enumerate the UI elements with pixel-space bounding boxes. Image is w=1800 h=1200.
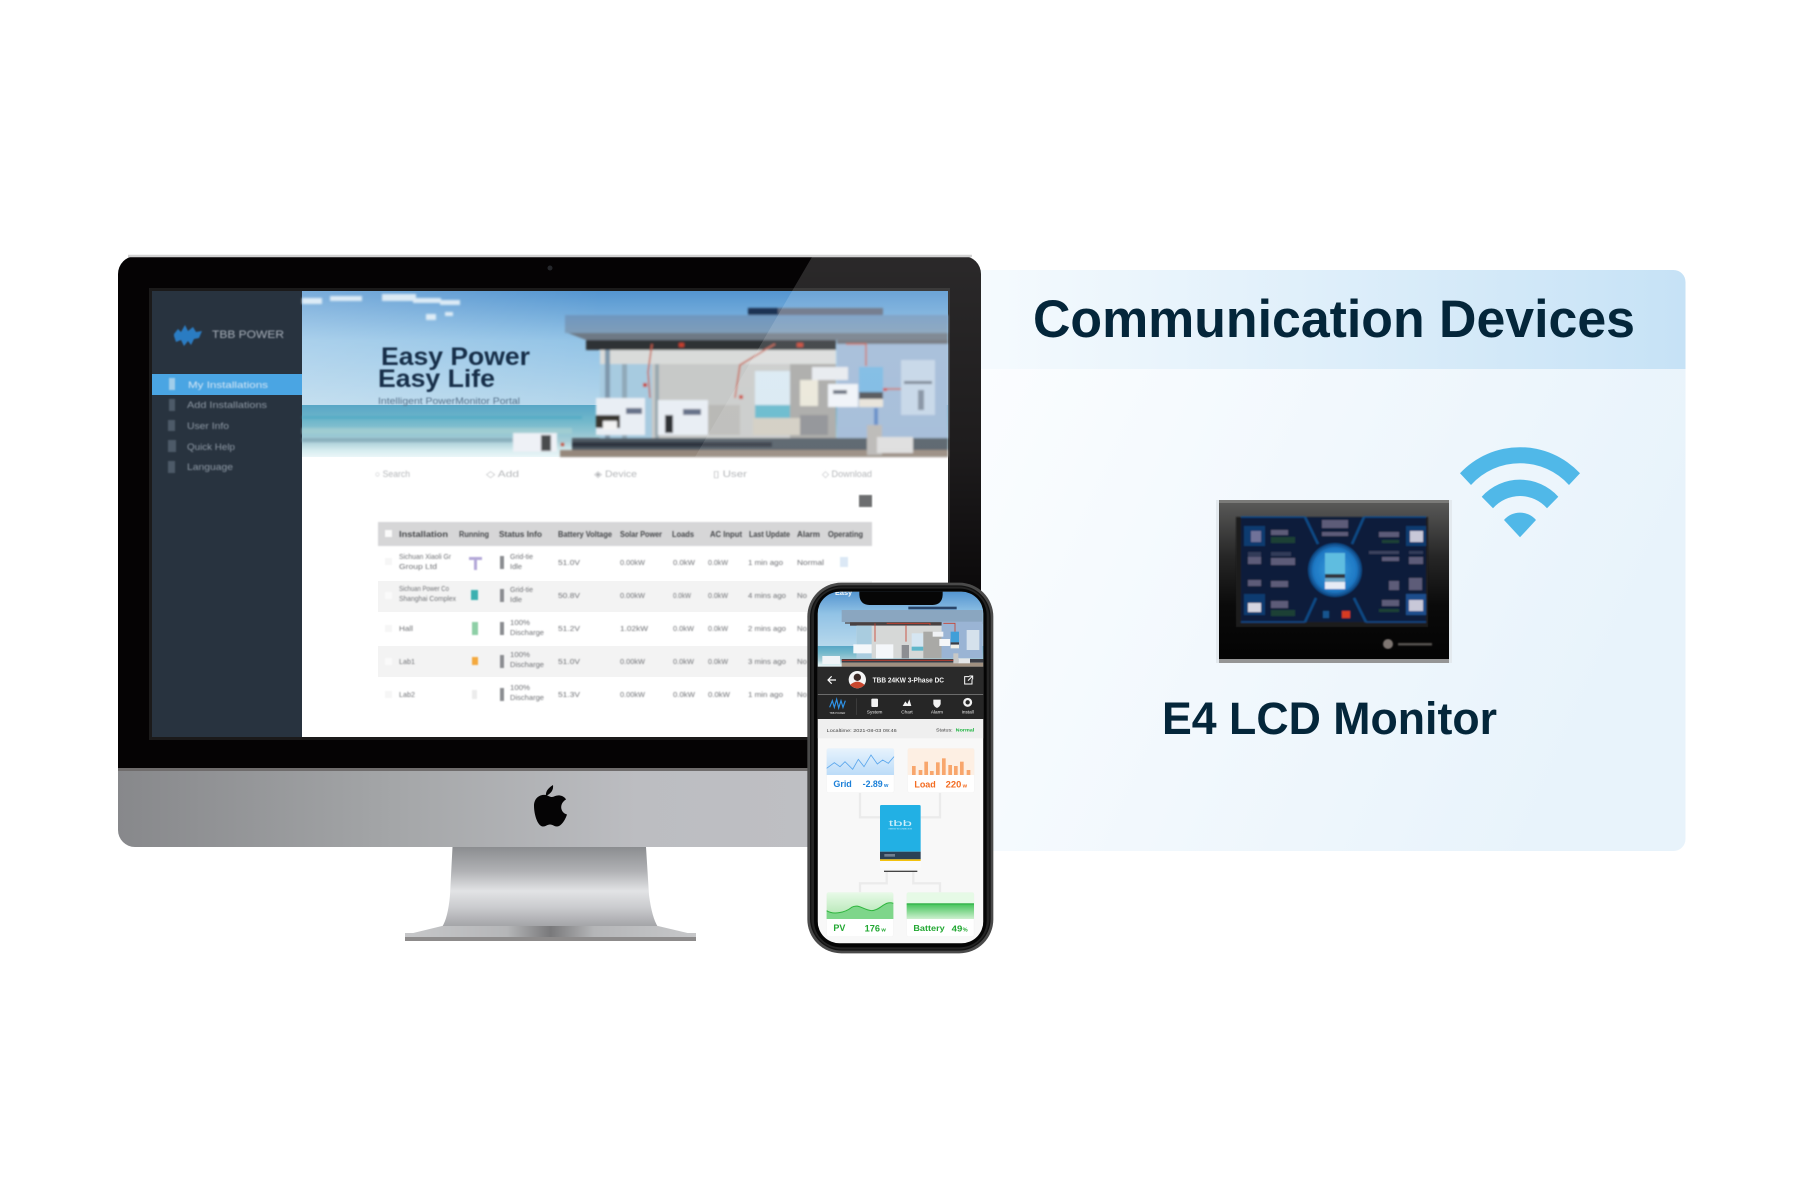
table rows: 3 mins ago [748, 657, 786, 666]
table header labels: Battery Voltage [558, 530, 613, 539]
panel body [970, 369, 1686, 851]
sidebar logo: TBB POWER [212, 329, 284, 341]
toolbar [375, 469, 872, 479]
computer body [118, 256, 981, 768]
computer screen [149, 257, 981, 740]
table rows: Normal [797, 558, 824, 567]
nav items [867, 699, 974, 715]
table header labels: Operating [828, 530, 863, 539]
table rows: 0.0kW [708, 558, 729, 567]
status row [818, 719, 983, 738]
table rows: Discharge [510, 628, 544, 637]
table header labels: Status Info [499, 530, 542, 539]
phone banner [818, 588, 983, 667]
phone notch [859, 592, 943, 605]
device: smartphone [807, 583, 993, 953]
table rows: Lab1 [399, 657, 415, 666]
status row: Localtime: 2021-08-03 09:46 [827, 728, 897, 734]
avatar [849, 671, 866, 688]
table rows: Sichuan Xiaoli Gr [399, 552, 451, 561]
computer chin [118, 771, 981, 847]
LCD screen [1236, 517, 1428, 627]
screen page [302, 457, 948, 737]
table rows: 100% [510, 618, 530, 627]
table rows: 0.0kW [673, 690, 696, 699]
table rows: Grid-tie [510, 552, 533, 561]
table rows: Grid-tie [510, 585, 533, 594]
sidebar menu: My Installations [188, 380, 268, 391]
clouds [302, 294, 460, 320]
table rows: Idle [510, 562, 522, 571]
table checkboxes [385, 530, 392, 698]
screen glare [695, 257, 981, 640]
table rows: Group Ltd [399, 562, 437, 571]
installations table [378, 522, 872, 702]
inverter [880, 805, 921, 872]
table header [378, 522, 872, 546]
table rows: 0.0kW [708, 591, 729, 600]
card: PV: PV [833, 923, 845, 933]
phone navigation bar [818, 694, 983, 719]
table rows: Lab2 [399, 690, 415, 699]
table rows: No [797, 624, 807, 633]
sidebar menu [168, 378, 268, 473]
house monitoring cards [513, 360, 935, 452]
table rows: Hall [399, 624, 413, 633]
table rows: 0.0kW [708, 657, 729, 666]
table rows: 0.00kW [620, 690, 646, 699]
card: PV: w [880, 928, 886, 934]
panel header band [970, 270, 1686, 369]
infographic canvas [118, 254, 1686, 954]
table rows: 0.0kW [673, 591, 692, 600]
card: grid: w [883, 783, 889, 789]
card: battery [907, 892, 974, 937]
table rows: 0.00kW [620, 657, 646, 666]
heading: Communication Devices [1033, 290, 1635, 349]
status row: Status: [936, 728, 953, 734]
table rows: 0.00kW [620, 558, 646, 567]
table rows: 0.0kW [708, 690, 731, 699]
nav items: Install [962, 710, 974, 715]
card: PV: 176 [865, 924, 880, 934]
house battery [867, 425, 882, 455]
nav logo: TBB POWER [829, 711, 845, 715]
table rows: Shanghai Complex [399, 594, 456, 603]
card: battery: Battery [913, 923, 945, 933]
table rows: 51.2V [558, 624, 580, 633]
card: load [908, 748, 974, 788]
phone frame [807, 583, 993, 953]
table rows: No [797, 657, 807, 666]
toolbar: ◇ Add [486, 469, 519, 479]
share icon [965, 676, 973, 684]
toolbar: ◇ Download [822, 469, 872, 479]
table rows: 50.8V [558, 591, 580, 600]
table header labels: Running [459, 530, 489, 539]
sidebar menu: Language [187, 462, 233, 473]
selected menu row [152, 374, 302, 395]
table rows: 51.0V [558, 657, 580, 666]
inverter: ENERGY IN CONNECTION [889, 829, 913, 831]
LCD logo [1383, 639, 1432, 649]
back arrow [828, 676, 836, 684]
screen frame [149, 288, 950, 740]
device title: TBB 24KW 3-Phase DC [873, 677, 944, 684]
table rows: 0.00kW [620, 591, 646, 600]
toolbar: ○ Search [375, 469, 410, 479]
table rows [399, 552, 824, 702]
sidebar [152, 291, 302, 737]
sidebar menu: Add Installations [187, 400, 267, 411]
banner slogan: Easy Life [378, 365, 495, 393]
table rows: No [797, 690, 807, 699]
table header labels: Last Update [749, 530, 790, 539]
phone house [822, 607, 983, 667]
running status icons [469, 557, 848, 699]
webcam [548, 266, 552, 270]
icon: apple logo [534, 785, 567, 826]
sidebar menu: Quick Help [187, 442, 235, 453]
table header labels: Solar Power [620, 530, 662, 539]
table rows: Sichuan Power Co [399, 584, 449, 593]
table header labels: Alarm [797, 530, 820, 539]
icon: wifi signal [1460, 447, 1580, 537]
table rows: 2 mins ago [748, 624, 786, 633]
banner slogan: Easy Power [381, 343, 530, 371]
table header labels: Installation [399, 530, 448, 539]
banner slogan: Intelligent PowerMonitor Portal [378, 396, 520, 406]
phone screen [818, 588, 983, 943]
sidebar menu: User Info [187, 421, 229, 432]
card: load: w [962, 783, 968, 789]
table rows: 0.0kW [708, 624, 729, 633]
wiring [648, 344, 901, 398]
table rows: 1.02kW [620, 624, 649, 633]
table rows: 100% [510, 683, 530, 692]
table rows: 51.0V [558, 558, 580, 567]
settings button [859, 495, 872, 507]
panel: communication devices [970, 270, 1686, 851]
card: load: Load [914, 779, 936, 789]
nav items: Alarm [931, 710, 943, 715]
card: grid: Grid [833, 779, 852, 789]
card: load: 220 [946, 779, 961, 789]
inverter: tbb [889, 818, 912, 828]
table header labels: Loads [672, 530, 695, 539]
table rows: Idle [510, 595, 522, 604]
table rows: 1 min ago [748, 690, 783, 699]
nav logo [829, 699, 845, 715]
nav items: System [867, 710, 883, 715]
table rows: 4 mins ago [748, 591, 786, 600]
card: grid [826, 748, 894, 787]
table header labels: AC Input [710, 530, 742, 539]
banner slogan [378, 343, 530, 406]
banner photo [302, 257, 981, 640]
sidebar logo [174, 325, 284, 346]
table rows: 100% [510, 650, 530, 659]
house [513, 315, 948, 457]
table rows: 51.3V [558, 690, 580, 699]
table row stripes [378, 581, 872, 677]
connector lines [860, 793, 940, 892]
sea stripes [302, 416, 582, 442]
table rows: 0.0kW [673, 558, 696, 567]
toolbar: ◈ Device [594, 469, 637, 479]
device caption: E4 LCD Monitor [1162, 693, 1497, 744]
card: battery: 49 [952, 924, 963, 934]
table rows: 1 min ago [748, 558, 783, 567]
banner top-right menu [748, 308, 883, 315]
table rows: Discharge [510, 693, 544, 702]
table rows: Discharge [510, 660, 544, 669]
table rows: No [797, 591, 807, 600]
status row: Normal [956, 728, 975, 734]
house floor [572, 438, 948, 450]
toolbar: ▯ User [713, 469, 747, 479]
nav items: Chart [901, 710, 913, 715]
card: battery: % [963, 928, 968, 934]
card: grid: -2.89 [863, 779, 883, 789]
table header labels [399, 530, 863, 539]
card: PV [826, 892, 894, 932]
device: desktop computer [118, 256, 981, 941]
table rows: 0.0kW [673, 624, 695, 633]
table rows: 0.0kW [673, 657, 695, 666]
device: E4 LCD monitor [1216, 500, 1452, 663]
phone banner slogan: Easy [835, 588, 853, 597]
computer stand [405, 847, 696, 941]
phone header bar [818, 667, 983, 694]
